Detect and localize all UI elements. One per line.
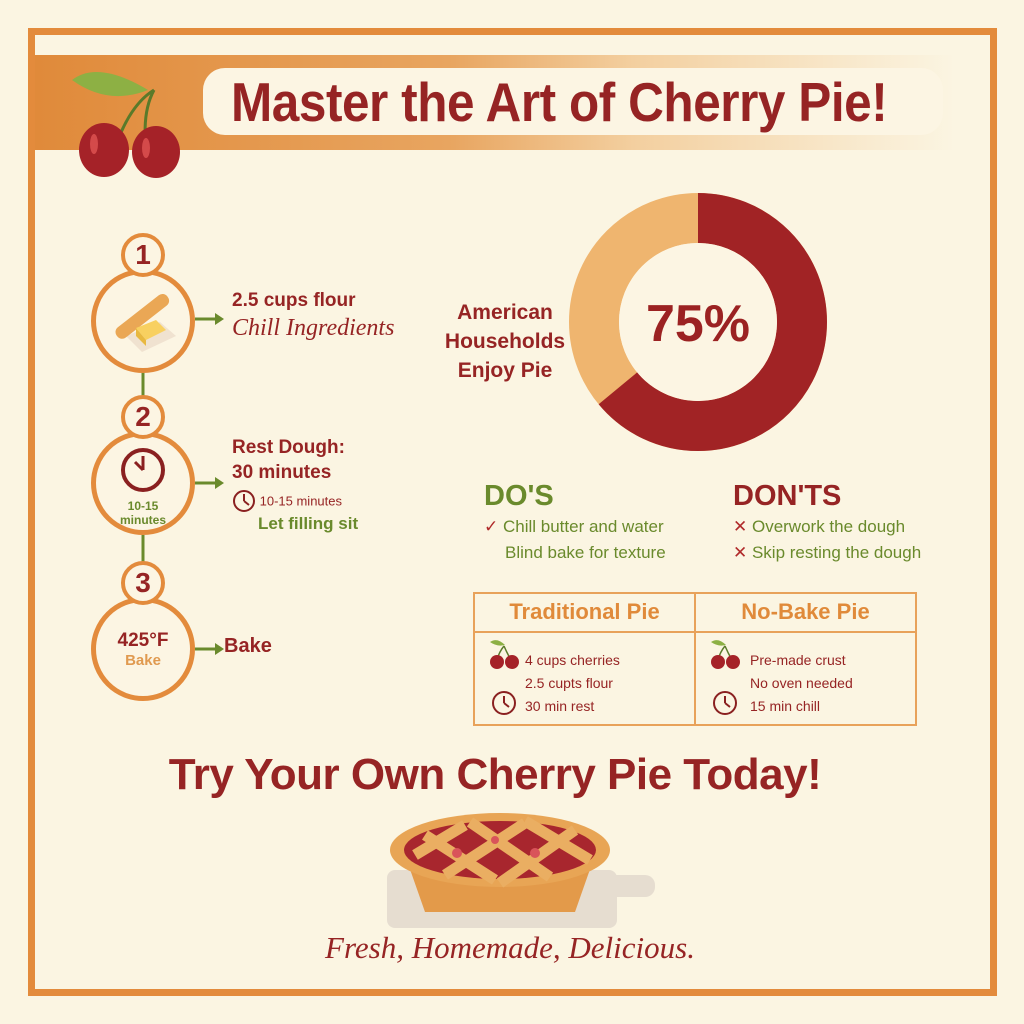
- step 2 text: 30 minutes: [232, 462, 331, 483]
- donut label: [445, 301, 565, 382]
- arrow: [195, 313, 224, 325]
- icon: clock with minutes: [91, 431, 195, 535]
- donts: ✕ Skip resting the dough: [733, 543, 921, 562]
- step 2 text: 10-15 minutes: [260, 494, 342, 508]
- step 2 text: Rest Dough:: [232, 437, 345, 458]
- no-bake column: No oven needed: [750, 675, 853, 691]
- no-bake column: Pre-made crust: [750, 652, 846, 668]
- comparison table: [473, 592, 917, 726]
- step 2 text: [232, 437, 358, 533]
- step 1 text: Chill Ingredients: [232, 315, 394, 341]
- title: Master the Art of Cherry Pie!: [231, 71, 887, 133]
- oven temp: 425°F: [118, 630, 168, 651]
- icon: rolling pin and butter: [91, 269, 195, 373]
- tagline: Fresh, Homemade, Delicious.: [325, 930, 695, 965]
- traditional column: 4 cups cherries: [525, 652, 620, 668]
- oven temp: [91, 597, 195, 701]
- icon: clock with minutes: minutes: [120, 513, 166, 527]
- number 3: 3: [135, 567, 151, 598]
- number 1: 1: [135, 239, 151, 270]
- steps timeline: [91, 233, 394, 701]
- header band: [35, 55, 955, 150]
- donts: ✕ Overwork the dough: [733, 517, 905, 536]
- number 2: 2: [135, 401, 151, 432]
- step 3: [91, 561, 272, 701]
- title pill: [203, 68, 943, 135]
- dos: DO'S: [484, 480, 554, 512]
- no-bake column: No-Bake Pie: [741, 599, 870, 624]
- donut chart: [569, 193, 827, 451]
- step 1: [91, 233, 394, 373]
- dos: ✓ Chill butter and water: [484, 517, 664, 536]
- traditional column: [490, 599, 660, 715]
- no-bake column: 15 min chill: [750, 698, 820, 714]
- connector lines: [142, 372, 144, 562]
- arrow: [195, 643, 224, 655]
- call to action heading: Try Your Own Cherry Pie Today!: [169, 750, 821, 799]
- donut label: Households: [445, 330, 565, 353]
- traditional column: Traditional Pie: [509, 599, 660, 624]
- traditional column: 30 min rest: [525, 698, 594, 714]
- donut chart: 75%: [646, 295, 750, 353]
- traditional column: 2.5 cupts flour: [525, 675, 613, 691]
- step 1 text: [232, 290, 394, 341]
- icon: clock with minutes: 10-15: [128, 499, 158, 513]
- donut label: Enjoy Pie: [458, 359, 552, 382]
- number 1: [121, 233, 165, 277]
- number 2: [121, 395, 165, 439]
- donts: [733, 480, 921, 562]
- oven temp: Bake: [125, 652, 161, 669]
- dos: Blind bake for texture: [505, 543, 666, 562]
- dos: [484, 480, 666, 562]
- step 1 text: 2.5 cups flour: [232, 290, 356, 311]
- donut label: American: [457, 301, 553, 324]
- step 3 text: Bake: [224, 635, 272, 657]
- donts: DON'TS: [733, 480, 841, 512]
- step 2: [91, 395, 358, 535]
- number 3: [121, 561, 165, 605]
- pie illustration: [387, 813, 655, 928]
- icon: cherries header: [72, 72, 180, 178]
- arrow: [195, 477, 224, 489]
- no-bake column: [711, 599, 870, 715]
- step 2 text: Let filling sit: [258, 514, 358, 533]
